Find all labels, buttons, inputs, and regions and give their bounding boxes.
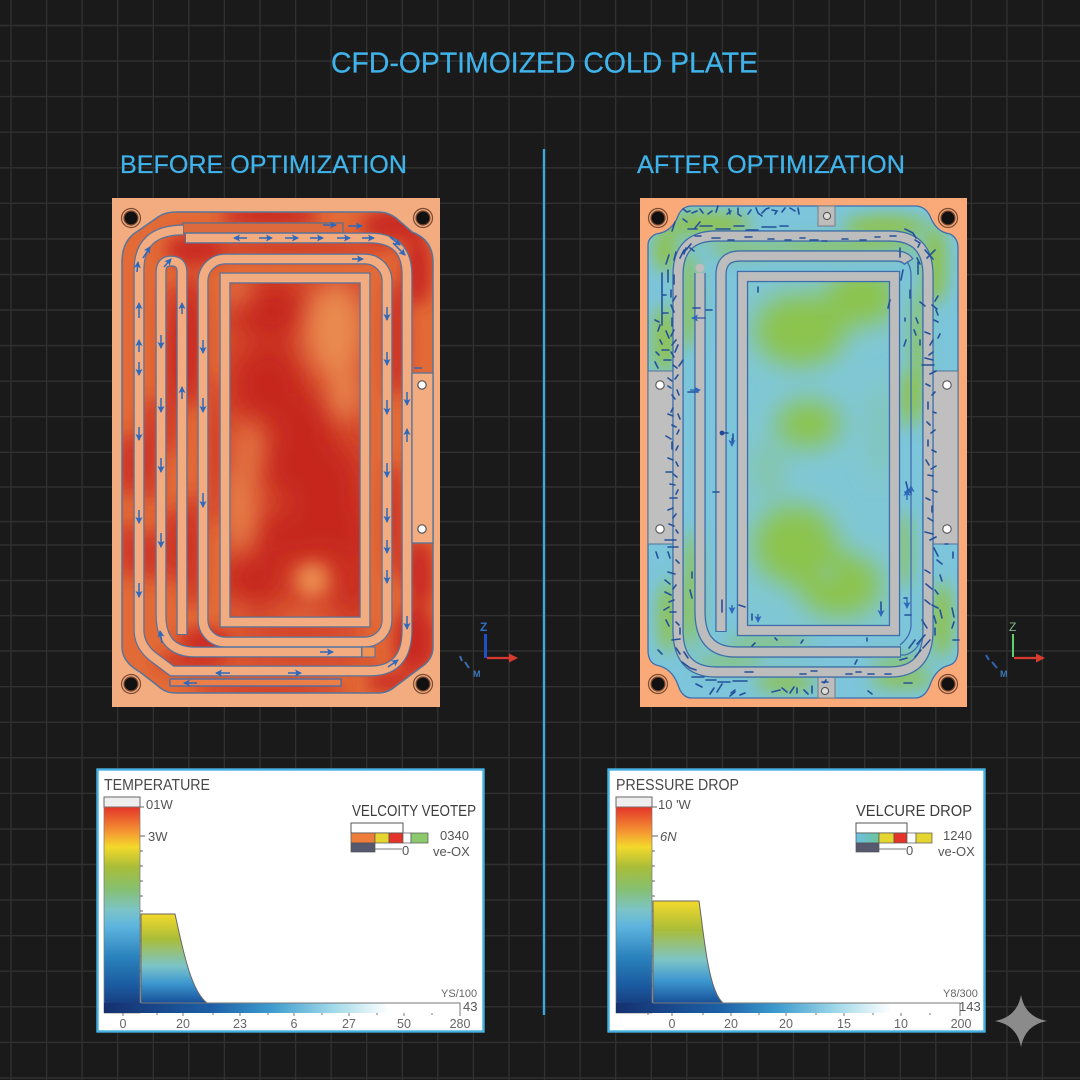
panel: temperature chart <box>98 770 484 1032</box>
heat map: before centre <box>230 284 360 616</box>
right tab <box>412 373 433 543</box>
axis triad: before <box>460 620 516 679</box>
bolt holes <box>122 208 432 694</box>
side tab: right <box>923 371 958 544</box>
flow dot <box>720 431 724 435</box>
heading: after optimization: AFTER OPTIMIZATION <box>637 151 905 179</box>
x axis labels: 280 <box>450 1017 470 1031</box>
tab hole: upper <box>418 381 426 389</box>
x axis labels: 50 <box>397 1017 411 1031</box>
hairpin cap <box>696 264 704 272</box>
heat map: after centre <box>748 282 889 625</box>
x axis labels: 10 <box>894 1017 908 1031</box>
colour scale <box>616 797 658 1013</box>
scale label: top: 10 'W <box>658 797 692 812</box>
channels: outline <box>678 236 928 672</box>
top tab <box>818 206 835 226</box>
legend: VELCOITY VEOTEP <box>352 803 476 820</box>
legend: 0 <box>402 843 409 858</box>
x axis labels <box>120 1017 470 1031</box>
x axis labels: 0 <box>669 1017 676 1031</box>
side tab: left <box>648 371 682 544</box>
profile area <box>141 914 207 1003</box>
channels: fill <box>139 230 407 671</box>
panel: before cold plate <box>112 198 440 707</box>
chart frame <box>608 770 984 1032</box>
right label: upper: YS/100 <box>441 988 477 1000</box>
channel end cap <box>362 647 375 657</box>
scale label: top: 01W <box>146 797 173 812</box>
x axis labels: 6 <box>291 1017 298 1031</box>
baseline bar outline <box>141 1003 460 1013</box>
channels: fill <box>678 236 928 672</box>
channel: bottom strip <box>170 679 341 686</box>
center divider <box>543 149 545 1015</box>
channels: outline <box>139 230 407 671</box>
legend: 0 <box>906 843 913 858</box>
thin channel walls <box>897 256 923 655</box>
legend <box>856 803 975 859</box>
heat map: after <box>640 198 967 707</box>
panel: after cold plate <box>640 198 967 707</box>
legend <box>351 803 476 859</box>
channel: top strip <box>183 223 343 233</box>
flow arrows: after <box>690 318 911 622</box>
chart title: PRESSURE DROP <box>616 777 739 794</box>
legend: ve-OX <box>938 844 975 859</box>
baseline bar <box>616 1003 960 1013</box>
baseline bar <box>104 1003 460 1013</box>
right label: upper: Y8/300 <box>943 988 978 1000</box>
x axis labels: 0 <box>120 1017 127 1031</box>
region outline <box>648 206 958 698</box>
axis triad: before: Z <box>480 620 487 634</box>
legend: 1240 <box>943 828 972 843</box>
bottom tab <box>818 677 835 698</box>
x axis labels: 20 <box>176 1017 190 1031</box>
tab hole: lower <box>418 525 426 533</box>
icon: sparkle watermark <box>995 995 1047 1047</box>
flow arrows: before <box>137 225 422 683</box>
tab holes <box>656 212 951 695</box>
profile area <box>653 901 723 1003</box>
axis triad: after <box>986 620 1043 679</box>
legend: VELCURE DROP <box>856 803 972 820</box>
scale label: mid: 3W <box>148 829 168 844</box>
chart title: TEMPERATURE <box>104 777 210 794</box>
colour scale <box>104 797 145 1013</box>
scale label: mid: 6N <box>660 829 677 844</box>
region outline <box>122 212 433 693</box>
x axis labels: 200 <box>951 1017 971 1031</box>
x axis labels: 27 <box>342 1017 356 1031</box>
panel: pressure drop chart <box>608 770 984 1032</box>
axis triad: before: M <box>473 669 480 679</box>
axis ticks <box>648 1013 960 1016</box>
axis triad: after: Z <box>1009 620 1016 634</box>
legend: 0340 <box>440 828 469 843</box>
axis ticks <box>123 1013 460 1016</box>
plate body <box>112 198 440 707</box>
turbulent flow marks <box>655 206 959 696</box>
title: CFD-OPTIMOIZED COLD PLATE <box>331 48 758 80</box>
x axis labels: 20 <box>724 1017 738 1031</box>
plate body <box>640 198 967 707</box>
heading: before optimization: BEFORE OPTIMIZATION <box>120 151 407 179</box>
x axis labels: 15 <box>837 1017 851 1031</box>
right label: lower: 43 <box>463 999 477 1014</box>
baseline bar outline <box>653 1003 960 1013</box>
legend: ve-OX <box>433 844 470 859</box>
x axis labels <box>669 1017 971 1031</box>
chart frame <box>98 770 484 1032</box>
x axis labels: 23 <box>233 1017 247 1031</box>
heat map: before <box>122 212 432 692</box>
bolt holes <box>648 208 958 694</box>
x axis labels: 20 <box>779 1017 793 1031</box>
axis triad: after: M <box>1000 669 1008 679</box>
right label: lower: 143 <box>959 999 981 1014</box>
